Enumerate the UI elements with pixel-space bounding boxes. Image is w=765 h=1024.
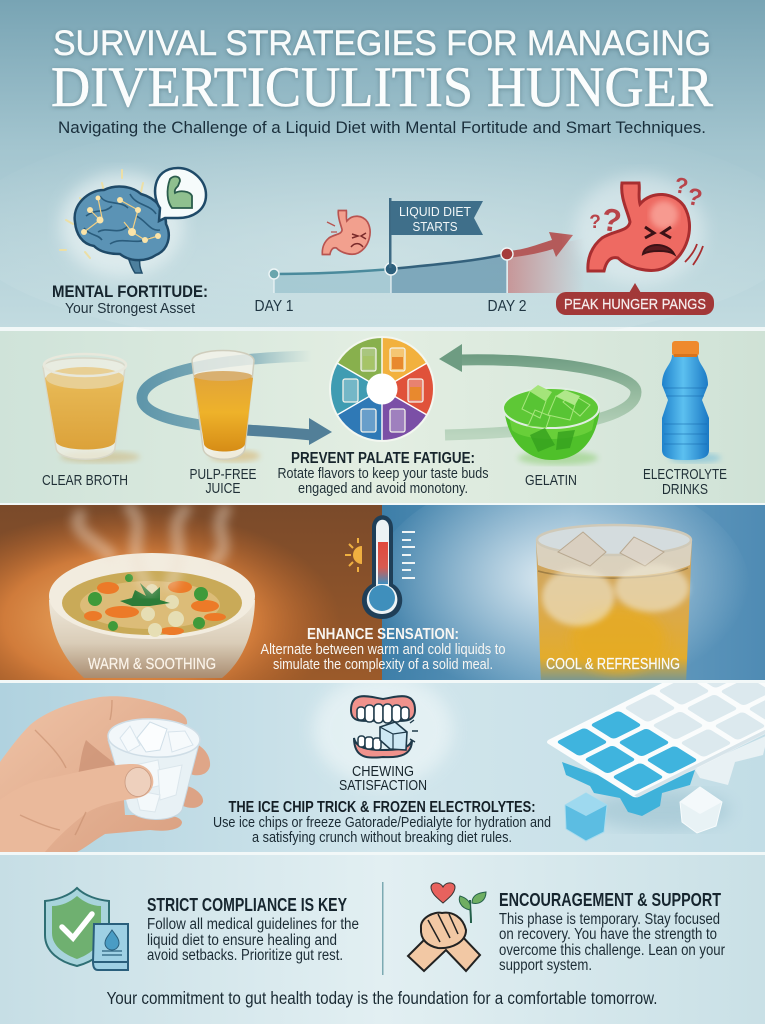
text: prevent palate fatigue: Rotate flavors to keep your taste buds	[278, 466, 488, 482]
text: mental fortitude	[52, 283, 208, 317]
icon: clasped hands with heart and sprout	[408, 883, 486, 971]
flag: liquid diet starts: LIQUID DIET	[399, 204, 471, 219]
text: ice chip trick: Use ice chips or freeze Gatorade/Pedialyte for hydration and	[213, 815, 551, 831]
text: prevent palate fatigue: engaged and avoid monotony.	[298, 481, 468, 497]
icon: hand holding cup	[0, 696, 210, 852]
text: encouragement and support: support system.	[499, 957, 592, 974]
steam	[78, 508, 225, 590]
icon: pulp-free juice glass	[192, 350, 260, 462]
text: chewing satisfaction: SATISFACTION	[339, 777, 427, 794]
text: strict compliance	[147, 894, 359, 964]
text: enhance sensation: Alternate between warm and cold liquids to	[260, 642, 506, 658]
icon: electrolyte bottle	[662, 341, 721, 463]
label: day 2: DAY 2	[488, 298, 526, 315]
icon: large stomach: ?	[673, 172, 690, 199]
label: pulp-free juice	[190, 466, 256, 497]
text: strict compliance: avoid setbacks. Prioritize gut rest.	[147, 947, 343, 964]
text: ice chip trick: THE ICE CHIP TRICK & FROZEN ELECTROLYTES:	[228, 799, 536, 816]
icon: iced glass	[536, 525, 692, 684]
panel: prevent palate fatigue	[0, 331, 765, 503]
icon: soup bowl	[49, 553, 255, 678]
text: enhance sensation	[260, 626, 506, 673]
icon: gelatin bowl	[503, 385, 600, 465]
text: encouragement and support	[499, 889, 725, 974]
label: day 1: DAY 1	[254, 298, 294, 315]
icon: clear ice cube	[680, 787, 722, 833]
icon: blue ice cube	[565, 793, 607, 841]
text: strict compliance: liquid diet to ensure healing and	[147, 932, 337, 949]
callout: peak hunger pangs	[556, 283, 714, 315]
text: strict compliance: STRICT COMPLIANCE IS KEY	[147, 894, 347, 915]
text: chewing satisfaction: CHEWING	[352, 763, 414, 780]
icon: brain with muscle bubble	[60, 168, 206, 277]
icon: large stomach: ?	[589, 212, 601, 233]
title: DIVERTICULITIS HUNGER	[51, 56, 713, 119]
text: closing message: Your commitment to gut health today is the foundation for a comfortable tomorrow.	[106, 988, 658, 1008]
text: cool label: COOL & REFRESHING	[546, 656, 680, 673]
label: clear broth: CLEAR BROTH	[42, 472, 128, 489]
text: warm label: WARM & SOOTHING	[88, 656, 216, 673]
icon: clear broth glass	[43, 354, 140, 463]
subtitle: Navigating the Challenge of a Liquid Diet with Mental Fortitude and Smart Techniques.	[58, 118, 706, 137]
chart: hunger timeline	[254, 172, 714, 315]
text: encouragement and support: on recovery. You have the strength to	[499, 926, 717, 943]
flag: liquid diet starts	[389, 198, 483, 268]
panel: enhance sensation	[0, 505, 765, 680]
icon: large stomach: ?	[599, 201, 624, 239]
label: gelatin: GELATIN	[525, 472, 577, 489]
icon: large stomach	[575, 172, 705, 285]
flag: liquid diet starts: STARTS	[412, 219, 458, 234]
text: encouragement and support: This phase is temporary. Stay focused	[499, 911, 720, 928]
text: encouragement and support: overcome this challenge. Lean on your	[499, 942, 725, 959]
icon: cup of ice	[107, 717, 201, 820]
text: enhance sensation: simulate the complexity of a solid meal.	[273, 657, 493, 673]
panel: chewing satisfaction	[0, 683, 765, 852]
arrow: rising hunger	[507, 232, 573, 258]
title	[51, 24, 713, 119]
icon: ice cube tray	[547, 683, 765, 842]
callout: peak hunger pangs: PEAK HUNGER PANGS	[564, 297, 706, 313]
title: SURVIVAL STRATEGIES FOR MANAGING	[53, 24, 711, 63]
panel: header and mental fortitude	[0, 0, 765, 350]
text: ice chip trick	[213, 799, 551, 846]
text: mental fortitude: MENTAL FORTITUDE:	[52, 283, 208, 301]
arrow: right rotation loop	[445, 360, 636, 435]
text: prevent palate fatigue: PREVENT PALATE FATIGUE:	[291, 450, 475, 467]
arrow: left rotation loop	[142, 356, 312, 434]
label: pulp-free juice: PULP-FREE	[190, 466, 256, 483]
panel: compliance and support	[0, 855, 765, 1024]
text: ice chip trick: a satisfying crunch without breaking diet rules.	[252, 830, 512, 846]
text: prevent palate fatigue	[278, 450, 488, 497]
icon: small stomach	[322, 210, 370, 254]
label: electrolyte drinks: DRINKS	[662, 481, 708, 498]
text: enhance sensation: ENHANCE SENSATION:	[307, 626, 459, 643]
icon: large stomach: ?	[685, 183, 705, 212]
text: strict compliance: Follow all medical guidelines for the	[147, 916, 359, 933]
icon: sun	[345, 538, 362, 572]
text: mental fortitude: Your Strongest Asset	[65, 300, 196, 317]
text: chewing satisfaction	[340, 766, 426, 790]
icon: shield and book	[45, 888, 128, 970]
chart: flavor wheel	[330, 337, 434, 441]
icon: teeth biting ice	[351, 696, 418, 758]
label: electrolyte drinks: ELECTROLYTE	[643, 466, 727, 483]
label: electrolyte drinks	[643, 466, 727, 498]
label: pulp-free juice: JUICE	[206, 480, 240, 497]
icon: thermometer	[345, 515, 415, 619]
